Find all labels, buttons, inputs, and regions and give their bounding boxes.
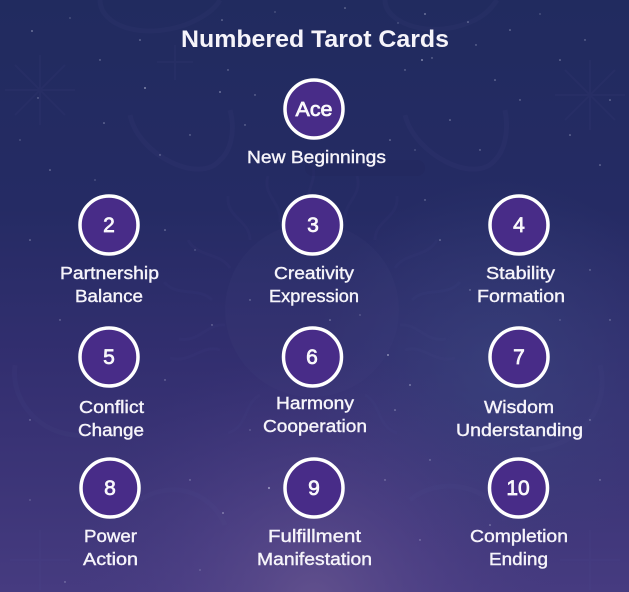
card: 6: Cooperation [263,416,367,436]
card: 4: 4 [513,214,525,237]
card: 5: Change [78,420,144,440]
card: 10: 10 [506,477,530,500]
card: 6: Harmony [276,393,354,413]
card: 9: 9 [308,477,320,500]
card: 5: 5 [103,346,115,369]
card: 4: Formation [477,286,565,306]
card: 6 [263,328,367,436]
card: 8: Power [84,526,137,546]
card: 9: Fulfillment [268,526,361,546]
card: 3: 3 [307,214,319,237]
card: 4 [477,196,565,306]
card: 3: Creativity [274,263,354,283]
card: 7: Understanding [456,420,583,440]
faint sun motif [164,160,460,433]
card: 2: Partnership [60,263,159,283]
card: 5 [78,328,144,440]
card: 8: Action [83,549,138,569]
card: 3: Expression [269,286,359,306]
card: 5: Conflict [79,397,144,417]
card: 2: Balance [75,286,143,306]
card: 9: Manifestation [257,549,372,569]
card: 2: 2 [103,214,115,237]
card: 7 [456,328,583,440]
card: 8 [81,459,139,569]
card: 8: 8 [104,477,116,500]
card: 9 [257,459,372,569]
card: Ace: Ace [296,99,332,121]
card: 7: 7 [513,346,525,369]
title: Numbered Tarot Cards [181,26,449,53]
card: 10: Completion [470,526,568,546]
card: 2 [60,196,159,306]
card: 4: Stability [486,263,555,283]
card: 6: 6 [306,346,318,369]
card: 10 [470,459,568,569]
card: 3 [269,196,359,306]
card: 7: Wisdom [484,397,554,417]
card: Ace [247,80,386,167]
card: 10: Ending [489,549,548,569]
card: Ace: New Beginnings [247,147,386,167]
watermark smudge [305,160,425,176]
